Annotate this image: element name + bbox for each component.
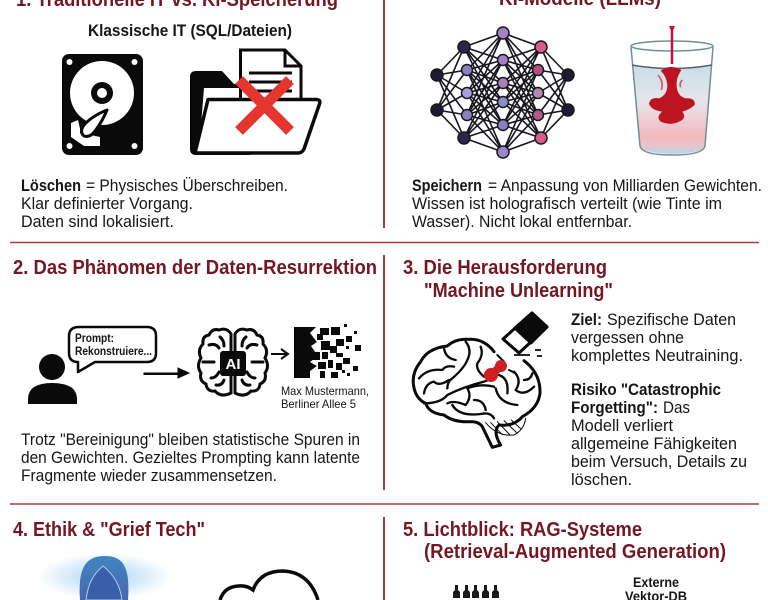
- panel: data resurrection: [13, 257, 377, 485]
- text: resurrection description: [21, 431, 360, 485]
- heading: section 5: (Retrieval-Augmented Generation): [424, 541, 726, 563]
- icon: cloud: [220, 571, 318, 600]
- icon: hooded digital figure: [38, 553, 172, 600]
- label: external vector DB: Externe: [633, 574, 679, 590]
- text: AI model description: Speichern: [412, 177, 482, 195]
- icon: fragmented data: [294, 324, 361, 378]
- label: reconstructed data: Berliner Allee 5: [281, 397, 356, 411]
- callout: prompt bubble: Prompt:: [75, 331, 114, 345]
- text: AI model description: [412, 177, 762, 231]
- panel: machine unlearning: [403, 257, 747, 489]
- text: AI model description: Wissen ist holografisch verteilt (wie Tinte im: [412, 195, 722, 213]
- callout: prompt bubble: Rekonstruiere...: [75, 344, 152, 358]
- text: risk: löschen.: [571, 471, 632, 489]
- icon: AI brain: AI: [226, 356, 240, 373]
- text: classic IT description: Löschen: [21, 177, 81, 195]
- icon: AI brain: [198, 329, 268, 395]
- text: classic IT description: Klar definierter Vorgang.: [21, 195, 193, 213]
- text: goal: komplettes Neutraining.: [571, 347, 743, 365]
- arrow: prompt to AI: [144, 368, 189, 378]
- icon: folder with red cross: [190, 50, 320, 155]
- text: classic IT description: [21, 177, 288, 231]
- text: risk: allgemeine Fähigkeiten: [571, 435, 737, 453]
- text: goal: [571, 311, 743, 365]
- icon: row of server pins: [453, 585, 499, 598]
- icon: ink in water glass: [631, 26, 713, 155]
- text: AI model description: Wasser). Nicht lokal entfernbar.: [412, 213, 632, 231]
- heading: section 3: [403, 257, 613, 302]
- text: risk: Das: [663, 399, 690, 417]
- icon: person: [28, 354, 77, 404]
- text: goal: Spezifische Daten: [607, 311, 736, 329]
- text: risk: [571, 381, 747, 489]
- heading: section 5: [403, 519, 726, 563]
- heading: section 2: 2. Das Phänomen der Daten-Resurrektion: [13, 257, 377, 279]
- text: risk: beim Versuch, Details zu: [571, 453, 747, 471]
- text: goal: vergessen ohne: [571, 329, 684, 347]
- text: risk: Modell verliert: [571, 417, 673, 435]
- text: risk: Risiko "Catastrophic: [571, 381, 721, 399]
- heading: section 3: 3. Die Herausforderung: [403, 257, 607, 279]
- text: classic IT description: Daten sind lokalisiert.: [21, 213, 174, 231]
- heading: section 4: 4. Ethik & "Grief Tech": [13, 519, 205, 541]
- label: reconstructed data: [281, 384, 369, 411]
- text: resurrection description: Fragmente wieder zusammensetzen.: [21, 467, 277, 485]
- text: classic IT description: = Physisches Überschreiben.: [86, 177, 288, 195]
- text: resurrection description: Trotz "Bereinigung" bleiben statistische Spuren in: [21, 431, 360, 449]
- heading: section 3: "Machine Unlearning": [424, 280, 613, 302]
- text: risk: Forgetting":: [571, 399, 658, 417]
- icon: hard drive: [62, 54, 143, 155]
- icon: neural network: [431, 27, 574, 158]
- panel: RAG systems: [403, 519, 726, 600]
- label: external vector DB: [625, 574, 687, 600]
- panel: traditional IT vs AI storage: [16, 0, 762, 231]
- panel: ethics and grief tech: [13, 519, 318, 600]
- icon: brain with eraser: [413, 313, 547, 447]
- label: reconstructed data: Max Mustermann,: [281, 384, 369, 398]
- subheading: classic IT: Klassische IT (SQL/Dateien): [88, 21, 292, 40]
- callout: prompt bubble: [69, 327, 156, 372]
- text: resurrection description: den Gewichten. Gezieltes Prompting kann latente: [21, 449, 360, 467]
- heading: section 5: 5. Lichtblick: RAG-Systeme: [403, 519, 642, 541]
- arrow: AI to fragments: [271, 349, 288, 359]
- text: goal: Ziel:: [571, 311, 602, 329]
